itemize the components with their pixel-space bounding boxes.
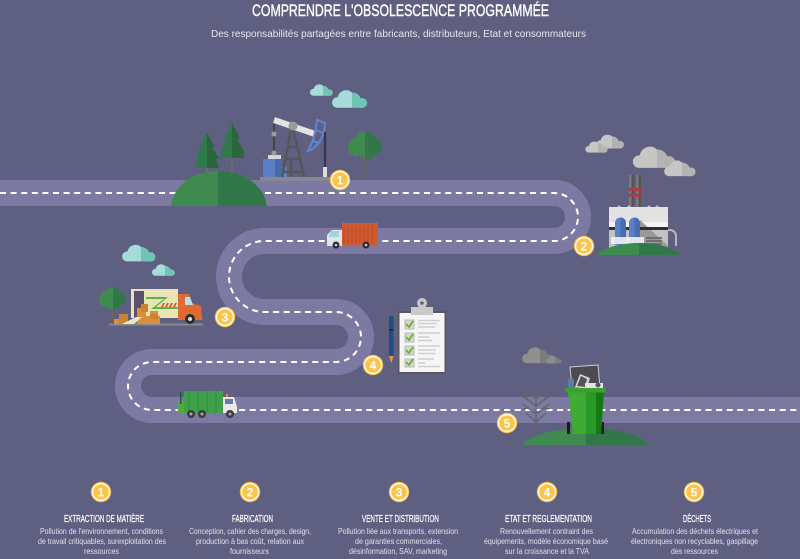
grey cloud above bin [522, 347, 562, 364]
step 1: extraction: Pollution de l'environnement, conditions [40, 526, 163, 536]
step 5: dechets [631, 482, 759, 556]
step 1: extraction [38, 482, 166, 556]
step 3: vente et distribution: désinformation, SAV, marketing [349, 546, 447, 556]
icon: red truck [327, 223, 378, 248]
step 4: etat et reglementation: Renouvellement contraint des [500, 526, 593, 536]
badge 4: 4 [370, 358, 377, 372]
icon: clipboard checklist [398, 298, 446, 374]
badge 1: 1 [337, 173, 344, 187]
step 3: vente et distribution: de garanties commerciales, [355, 536, 442, 546]
icon: oil pump [260, 120, 332, 180]
subtitle: Des responsabilités partagées entre fabricants, distributeurs, Etat et consommateurs [211, 28, 586, 40]
step 4: etat et reglementation: ETAT ET REGLEMENTATION [505, 514, 592, 525]
step 5: dechets: électroniques non recyclables, gaspillage [631, 536, 758, 546]
step 4: etat et reglementation: sur la croissance et la TVA [505, 546, 589, 556]
icon: bin hill [522, 428, 648, 445]
badge 1 [330, 170, 350, 190]
step 4: etat et reglementation [484, 482, 608, 556]
step 5: dechets: des ressources [671, 546, 718, 556]
step 2: fabrication: 2 [247, 485, 254, 499]
winding road [0, 193, 800, 410]
step 2: fabrication [189, 482, 311, 556]
step 2: fabrication: production à bas coût, relation aux [196, 536, 305, 546]
step 3: vente et distribution: 3 [396, 485, 403, 499]
step 1: extraction: ressources [84, 546, 119, 556]
step 3: vente et distribution: VENTE ET DISTRIBUTION [362, 514, 439, 525]
teal clouds near delivery truck [122, 245, 175, 276]
badge 3 [215, 307, 235, 327]
step 3: vente et distribution: Pollution liée aux transports, extension [338, 526, 458, 536]
step 4: etat et reglementation: 4 [544, 485, 551, 499]
badge 4 [363, 355, 383, 375]
badge 2: 2 [581, 239, 588, 253]
step 2: fabrication: FABRICATION [232, 514, 273, 525]
title: COMPRENDRE L'OBSOLESCENCE PROGRAMMÉE [252, 1, 549, 20]
badge 5: 5 [504, 416, 511, 430]
step 5: dechets: 5 [691, 485, 698, 499]
step 5: dechets: DÉCHETS [683, 512, 711, 525]
step 3: vente et distribution [338, 482, 458, 556]
icon: round tree [348, 131, 382, 180]
step 1: extraction: de travail critiquables, surexploitation des [38, 536, 166, 546]
step 2: fabrication: fournisseurs [230, 546, 269, 556]
icon: bare tree [523, 389, 549, 434]
icon: fountain pen [389, 316, 394, 363]
step 2: fabrication: Conception, cahier des charges, design, [189, 526, 311, 536]
badge 5 [497, 413, 517, 433]
icon: pine trees [195, 123, 244, 174]
grey clouds above factory [585, 135, 696, 177]
step 1: extraction: 1 [98, 485, 105, 499]
step 5: dechets: Accumulation des déchets électriques et [632, 526, 759, 536]
badge 2 [574, 236, 594, 256]
step 4: etat et reglementation: équipements, modèle économique basé [484, 536, 608, 546]
icon: green waste bin [565, 365, 606, 434]
badge 3: 3 [222, 310, 229, 324]
icon: delivery truck [99, 287, 203, 326]
icon: green hill [171, 171, 267, 206]
icon: factory hill [597, 243, 681, 255]
step 1: extraction: EXTRACTION DE MATIÈRE [64, 512, 144, 525]
icon: garbage truck [178, 391, 237, 418]
clouds near oil pump [310, 84, 367, 108]
icon: factory [609, 175, 676, 250]
